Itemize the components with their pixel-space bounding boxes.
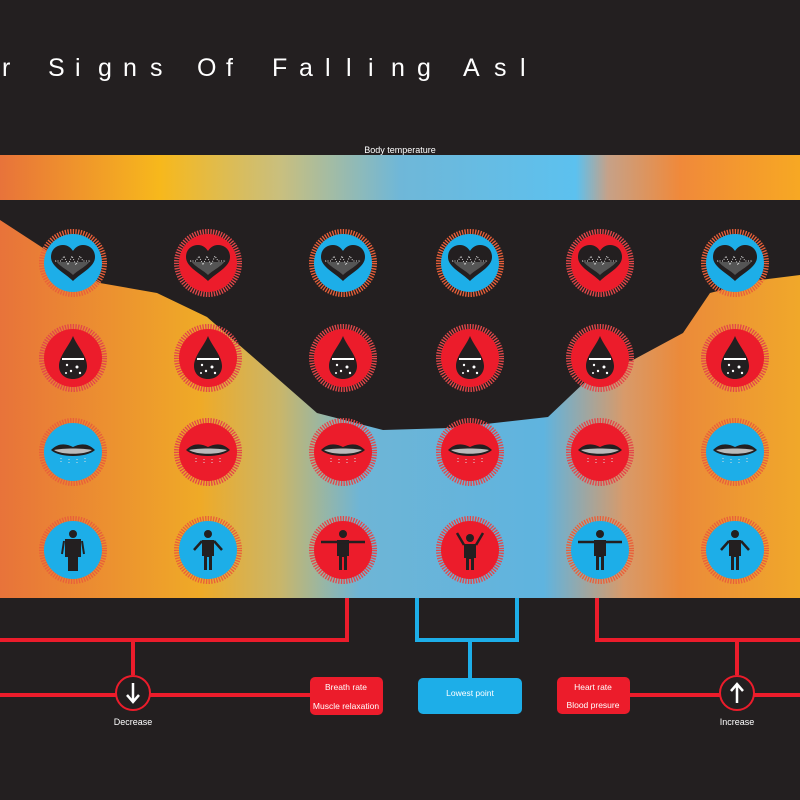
title: l bbox=[520, 54, 526, 82]
title: O bbox=[197, 54, 216, 82]
decrease indicator: Decrease bbox=[114, 717, 152, 727]
row: heart bbox=[42, 232, 766, 294]
label: body temperature: Body temperature bbox=[364, 145, 436, 155]
decrease indicator bbox=[114, 676, 152, 727]
gradient area chart bbox=[0, 200, 800, 598]
title: n bbox=[391, 54, 405, 82]
title: i bbox=[75, 54, 81, 82]
box: lowest point: Lowest point bbox=[446, 688, 494, 698]
title: s bbox=[150, 54, 162, 82]
title: a bbox=[299, 54, 313, 82]
title: g bbox=[417, 54, 431, 82]
title: s bbox=[494, 54, 506, 82]
box: breath rate / muscle relaxation: Breath rate bbox=[325, 682, 367, 692]
title: n bbox=[123, 54, 137, 82]
right connector lines bbox=[597, 598, 800, 695]
title: A bbox=[463, 54, 480, 82]
title: l bbox=[346, 54, 352, 82]
title: r bbox=[2, 54, 10, 82]
title: f bbox=[226, 54, 233, 82]
row: lips bbox=[42, 421, 766, 483]
increase indicator: Increase bbox=[720, 717, 754, 727]
row: drop bbox=[42, 327, 766, 389]
left connector lines bbox=[0, 598, 347, 695]
title: F bbox=[272, 54, 287, 82]
box: breath rate / muscle relaxation: Muscle relaxation bbox=[313, 701, 379, 711]
box: lowest point bbox=[418, 678, 522, 714]
box: heart rate / blood pressure bbox=[557, 677, 630, 714]
title: S bbox=[48, 54, 65, 82]
center connector lines bbox=[417, 598, 517, 680]
temperature gradient bar bbox=[0, 155, 800, 200]
row: person bbox=[42, 519, 766, 581]
box: heart rate / blood pressure: Blood presure bbox=[567, 700, 620, 710]
icon grid bbox=[42, 232, 766, 581]
title: g bbox=[98, 54, 112, 82]
increase indicator bbox=[720, 676, 754, 727]
box: breath rate / muscle relaxation bbox=[310, 677, 383, 715]
title: i bbox=[368, 54, 374, 82]
box: heart rate / blood pressure: Heart rate bbox=[574, 682, 612, 692]
title: l bbox=[325, 54, 331, 82]
